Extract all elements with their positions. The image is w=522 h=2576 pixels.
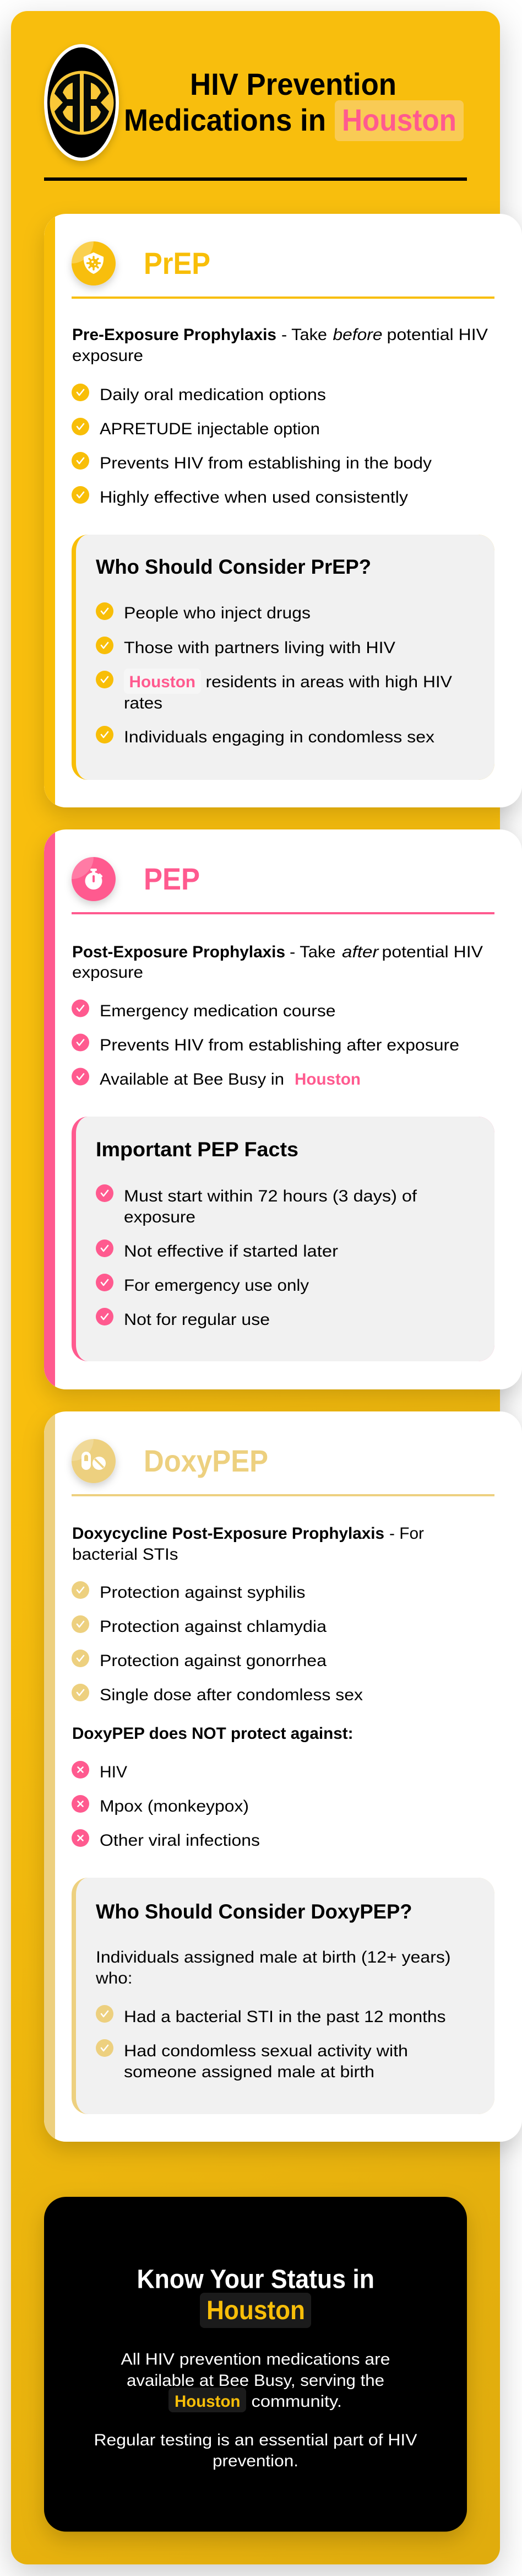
heading underline	[72, 1494, 494, 1496]
description: Doxycycline Post-Exposure Prophylaxis	[72, 1524, 384, 1543]
description: Pre-Exposure Prophylaxis	[72, 326, 276, 344]
testing text: Regular testing is an essential part of HIV	[94, 2431, 417, 2449]
heading: PEP: PEP	[144, 861, 200, 896]
list item: Not for regular use	[124, 1311, 270, 1329]
description: potential HIV	[387, 326, 488, 344]
callout intro: Individuals assigned male at birth (12+ years)	[96, 1948, 450, 1966]
description: potential HIV	[382, 943, 483, 961]
benefits list	[72, 1000, 459, 1088]
list item: People who inject drugs	[124, 604, 311, 622]
description: bacterial STIs	[72, 1545, 178, 1564]
description: after	[342, 943, 379, 961]
list item: Individuals engaging in condomless sex	[124, 728, 434, 746]
list item: Houston	[129, 673, 195, 691]
protection list	[72, 1581, 363, 1704]
list item: Daily oral medication options	[100, 386, 326, 404]
heading	[137, 2265, 374, 2328]
list item: Protection against syphilis	[100, 1583, 305, 1602]
list item: someone assigned male at birth	[124, 2063, 374, 2081]
list item: APRETUDE injectable option	[100, 420, 320, 438]
heading underline	[72, 912, 494, 914]
callout intro: who:	[95, 1969, 132, 1987]
heading: PrEP: PrEP	[144, 246, 210, 281]
description: exposure	[72, 963, 143, 982]
heading underline	[72, 297, 494, 299]
logo: Bee Busy BB emblem	[46, 46, 117, 159]
callout: who should consider PrEP	[72, 535, 494, 780]
header	[44, 46, 467, 181]
list item: Prevents HIV from establishing after exposure	[100, 1036, 459, 1054]
panel: PEP	[44, 829, 522, 1389]
list item: Must start within 72 hours (3 days) of	[124, 1187, 417, 1205]
list item: rates	[124, 694, 162, 712]
availability text: community.	[251, 2392, 342, 2411]
list item	[96, 1184, 417, 1226]
list item: Available at Bee Busy in	[100, 1070, 284, 1088]
list item: exposure	[124, 1208, 195, 1226]
list item: Mpox (monkeypox)	[100, 1797, 249, 1815]
list item	[96, 2039, 408, 2081]
description: - Take	[281, 326, 327, 344]
list item: Highly effective when used consistently	[100, 488, 408, 506]
callout: important PEP facts	[72, 1117, 494, 1361]
description	[72, 326, 488, 365]
description: Post-Exposure Prophylaxis	[72, 943, 285, 961]
list item: Other viral infections	[100, 1831, 260, 1850]
title: Houston	[342, 103, 456, 137]
header divider	[44, 177, 467, 181]
title: HIV Prevention	[190, 67, 396, 101]
list item: residents in areas with high HIV	[206, 673, 452, 691]
callout intro	[95, 1948, 450, 1987]
title	[124, 67, 464, 141]
callout heading: Who Should Consider PrEP?	[96, 556, 371, 578]
list item	[96, 669, 452, 712]
testing text	[94, 2431, 417, 2470]
list item: For emergency use only	[124, 1276, 309, 1295]
heading: DoxyPEP: DoxyPEP	[144, 1443, 268, 1478]
availability text	[121, 2350, 390, 2412]
testing text: prevention.	[213, 2452, 298, 2470]
list item	[96, 1308, 270, 1329]
exclusions list	[72, 1761, 260, 1850]
list item: Protection against chlamydia	[100, 1618, 327, 1636]
description: - For	[389, 1524, 424, 1543]
list item: Those with partners living with HIV	[124, 639, 395, 657]
availability text: available at Bee Busy, serving the	[127, 2372, 384, 2390]
title: Medications in	[124, 103, 326, 137]
list item: Single dose after condomless sex	[100, 1686, 363, 1704]
icon: stopwatch	[68, 857, 119, 907]
list item: HIV	[100, 1763, 127, 1781]
description: exposure	[72, 347, 143, 365]
callout: who should consider DoxyPEP	[72, 1878, 494, 2114]
list item	[72, 1761, 127, 1781]
list item	[72, 1068, 361, 1088]
description: - Take	[290, 943, 336, 961]
panel: know your status call to action	[44, 2197, 467, 2532]
list item: Protection against gonorrhea	[100, 1652, 327, 1670]
description: before	[333, 326, 382, 344]
list item: Had condomless sexual activity with	[124, 2042, 408, 2060]
list item: Emergency medication course	[100, 1002, 336, 1020]
list item: Had a bacterial STI in the past 12 months	[124, 2008, 446, 2026]
description	[72, 943, 483, 982]
heading: Houston	[206, 2296, 305, 2325]
callout heading: Who Should Consider DoxyPEP?	[96, 1900, 412, 1923]
list item: Not effective if started later	[124, 1242, 338, 1260]
icon: shield with virus	[68, 241, 119, 292]
panel: DoxyPEP	[44, 1411, 522, 2142]
availability text: Houston	[175, 2392, 240, 2411]
subheading: does not protect: DoxyPEP does NOT protect against:	[72, 1724, 354, 1743]
benefits list	[72, 384, 432, 506]
heading: Know Your Status in	[137, 2265, 374, 2294]
availability text: All HIV prevention medications are	[121, 2350, 390, 2369]
callout heading: Important PEP Facts	[96, 1138, 298, 1161]
list item: Houston	[295, 1070, 361, 1088]
panel: PrEP	[44, 214, 522, 807]
list item: Prevents HIV from establishing in the body	[100, 454, 432, 472]
icon: pills	[68, 1439, 119, 1489]
description	[72, 1524, 424, 1564]
